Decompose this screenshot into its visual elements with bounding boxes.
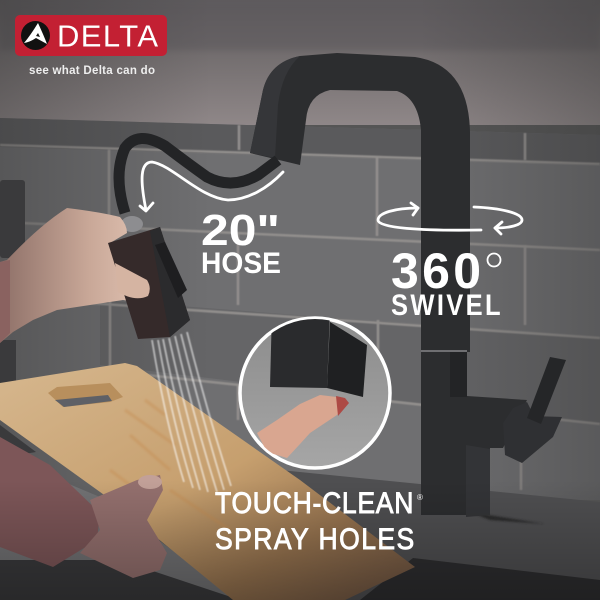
upper wall background bbox=[0, 0, 600, 125]
logo mark bbox=[21, 21, 50, 50]
handle lever bbox=[527, 357, 566, 424]
Delta logo badge: DELTA bbox=[57, 18, 158, 54]
base body bbox=[421, 352, 527, 515]
tiled backsplash bbox=[0, 118, 600, 500]
water spray bbox=[152, 332, 231, 492]
fingers over spray head bbox=[115, 263, 150, 298]
spout bbox=[250, 53, 470, 352]
cutting board bbox=[0, 363, 415, 600]
collar divider bbox=[421, 350, 467, 352]
20 inch label: HOSE bbox=[201, 247, 281, 280]
touch-clean inset circle bbox=[240, 310, 390, 468]
360 swivel label: SWIVEL bbox=[391, 288, 503, 321]
spray head bbox=[108, 227, 190, 339]
dark object at left edge bbox=[0, 180, 36, 458]
touch-clean label: ® bbox=[417, 493, 423, 502]
handle base bbox=[503, 402, 562, 463]
lower hand and sleeve bbox=[0, 437, 167, 578]
tagline: see what Delta can do bbox=[29, 65, 155, 77]
bottom shading bbox=[0, 480, 600, 600]
hose connector bbox=[121, 216, 143, 232]
countertop bbox=[0, 455, 600, 600]
faucet bbox=[250, 53, 566, 517]
20 inch label bbox=[201, 206, 281, 280]
fingernail bbox=[336, 396, 349, 416]
360 swivel arrows bbox=[378, 203, 522, 234]
touch-clean label bbox=[215, 487, 423, 555]
Delta logo badge bbox=[15, 15, 167, 56]
sleeve cuff bbox=[0, 260, 10, 343]
360 swivel label bbox=[391, 243, 503, 321]
inset spray head bbox=[270, 319, 330, 388]
touch-clean label: TOUCH-CLEAN bbox=[215, 487, 414, 519]
hose bbox=[119, 138, 278, 213]
white hose arrow bbox=[140, 162, 283, 211]
touch-clean label: SPRAY HOLES bbox=[215, 523, 416, 555]
360 swivel label: 360 bbox=[391, 243, 481, 299]
20 inch label: 20" bbox=[201, 206, 280, 255]
inset finger bbox=[257, 395, 348, 458]
upper hand bbox=[0, 208, 150, 343]
